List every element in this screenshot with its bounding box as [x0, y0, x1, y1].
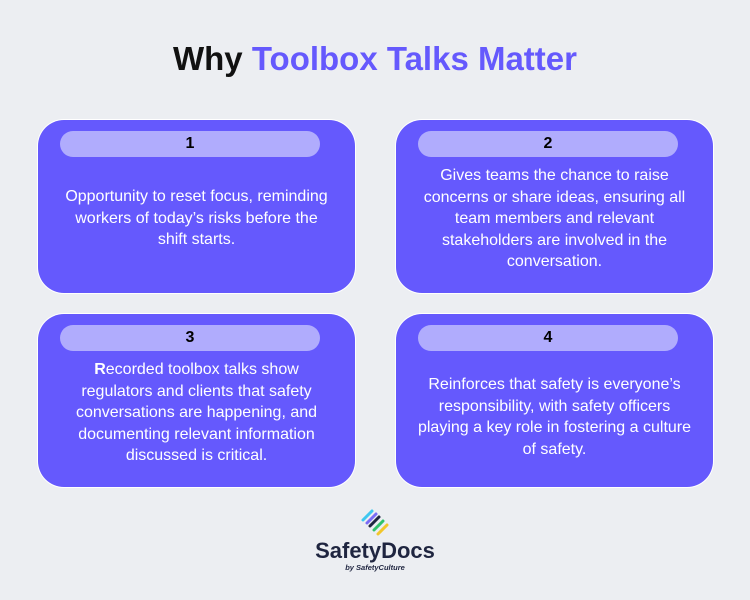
text 1: shift starts. — [158, 231, 235, 248]
number pill 2: 2 — [544, 135, 552, 152]
text 2: conversation. — [507, 253, 602, 270]
text 4: responsibility, with safety officers — [439, 398, 670, 414]
number pill 3: 3 — [186, 329, 194, 346]
number pill 4: 4 — [544, 329, 552, 346]
text 2: stakeholders are involved in the — [442, 232, 667, 248]
brand name: SafetyDocs — [315, 538, 435, 563]
text 3 — [76, 361, 317, 464]
tagline: by SafetyCulture — [345, 563, 405, 572]
number pill 1 — [60, 131, 320, 157]
number pill 1: 1 — [186, 135, 194, 152]
text 3: Recorded toolbox talks show — [94, 361, 299, 378]
number pill 2 — [418, 131, 678, 157]
text 4 — [418, 376, 691, 458]
text 3: discussed is critical. — [126, 447, 267, 464]
text 4: of safety. — [523, 440, 586, 458]
logo — [315, 509, 435, 572]
text 1: workers of today’s risks before the — [75, 210, 318, 226]
panel: 2 — [396, 120, 713, 293]
panel: 4 — [396, 314, 713, 487]
number pill 4 — [418, 325, 678, 351]
text 1 — [65, 188, 328, 248]
text 2: Gives teams the chance to raise — [440, 167, 669, 184]
text 2 — [424, 167, 685, 270]
text 3: documenting relevant information — [78, 426, 315, 442]
icon: logo mark — [361, 509, 389, 536]
text 4: Reinforces that safety is everyone’s — [428, 376, 681, 393]
text 1: Opportunity to reset focus, reminding — [65, 188, 328, 205]
text 4: playing a key role in fostering a culture — [418, 419, 691, 436]
text 2: team members and relevant — [455, 210, 654, 227]
text 3: conversations are happening, and — [76, 404, 317, 421]
number pill 3 — [60, 325, 320, 351]
panel: 3 — [38, 314, 355, 487]
text 2: concerns or share ideas, ensuring all — [424, 188, 685, 206]
text 3: regulators and clients that safety — [81, 382, 312, 400]
title: Why Toolbox Talks Matter — [173, 40, 577, 77]
panel: 1 — [38, 120, 355, 293]
